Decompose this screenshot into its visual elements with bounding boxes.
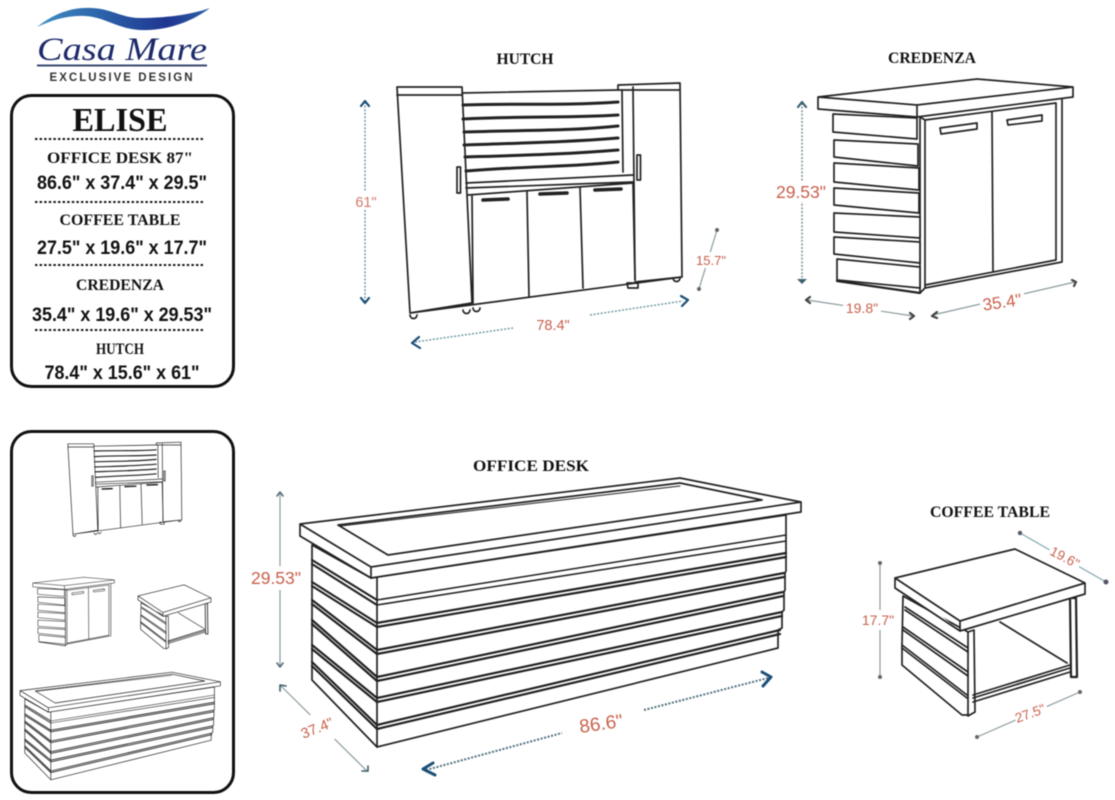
coffee table name: COFFEE TABLE <box>60 212 180 229</box>
dimension: coffee table width <box>975 690 1082 739</box>
dimension: coffee table depth: 19.6" <box>1048 544 1082 571</box>
dimension: hutch height: 61" <box>355 195 377 211</box>
thumbnail: coffee table <box>138 585 211 649</box>
dimension: desk depth: 37.4" <box>299 715 336 743</box>
dimension: desk width <box>423 672 771 775</box>
logo wordmark: Casa Mare <box>37 32 207 68</box>
thumbnail: hutch <box>68 442 182 536</box>
coffee table dimensions: 27.5" x 19.6" x 17.7" <box>37 238 207 259</box>
panel: set overview thumbnails <box>12 432 234 792</box>
credenza name: CREDENZA <box>76 277 164 294</box>
heading: HUTCH: HUTCH <box>496 51 554 68</box>
thumbnail: office desk <box>20 672 220 780</box>
dimension: credenza height: 29.53" <box>776 182 826 202</box>
drawing: office desk <box>300 478 801 747</box>
dimension: desk width: 86.6" <box>578 711 624 738</box>
heading: CREDENZA: CREDENZA <box>888 50 977 67</box>
heading: ELISE: ELISE <box>72 102 168 139</box>
dimension: desk height <box>250 492 304 667</box>
credenza dimensions: 35.4" x 19.6" x 29.53" <box>32 305 212 326</box>
heading: COFFEE TABLE: COFFEE TABLE <box>930 504 1050 521</box>
office desk dimensions: 86.6" x 37.4" x 29.5" <box>37 173 207 194</box>
dimension: coffee table width: 27.5" <box>1013 701 1048 726</box>
hutch dimensions: 78.4" x 15.6" x 61" <box>44 363 200 384</box>
panel: ELISE specifications <box>12 96 234 386</box>
dimension: coffee table height: 17.7" <box>862 612 894 628</box>
office desk name: OFFICE DESK 87" <box>47 150 193 167</box>
logo rule <box>37 64 207 66</box>
drawing: credenza <box>818 79 1073 293</box>
hutch name: HUTCH <box>96 341 144 358</box>
drawing: coffee table <box>895 549 1085 716</box>
logo tagline: EXCLUSIVE DESIGN <box>50 72 192 84</box>
dimension: desk height: 29.53" <box>251 568 301 588</box>
logo: Casa Mare <box>37 8 210 84</box>
dimension: credenza depth <box>806 297 914 319</box>
dimension: coffee table depth <box>1018 531 1108 584</box>
dimension: hutch height <box>353 101 379 303</box>
dimension: credenza width: 35.4" <box>981 290 1023 315</box>
dimension: credenza height <box>775 102 827 284</box>
thumbnail: credenza <box>33 577 114 646</box>
dimension: hutch depth: 15.7" <box>696 253 726 268</box>
dimension: hutch width: 78.4" <box>536 318 570 334</box>
dimension: hutch width <box>412 296 688 348</box>
dimension: credenza depth: 19.8" <box>846 300 878 316</box>
dimension: credenza width <box>932 280 1076 318</box>
dimension: coffee table height <box>862 561 896 679</box>
logo wave <box>37 8 210 30</box>
heading: OFFICE DESK: OFFICE DESK <box>473 458 589 475</box>
dimension: desk depth <box>280 685 368 772</box>
dimension: hutch depth <box>695 228 726 291</box>
drawing: hutch <box>397 83 682 319</box>
